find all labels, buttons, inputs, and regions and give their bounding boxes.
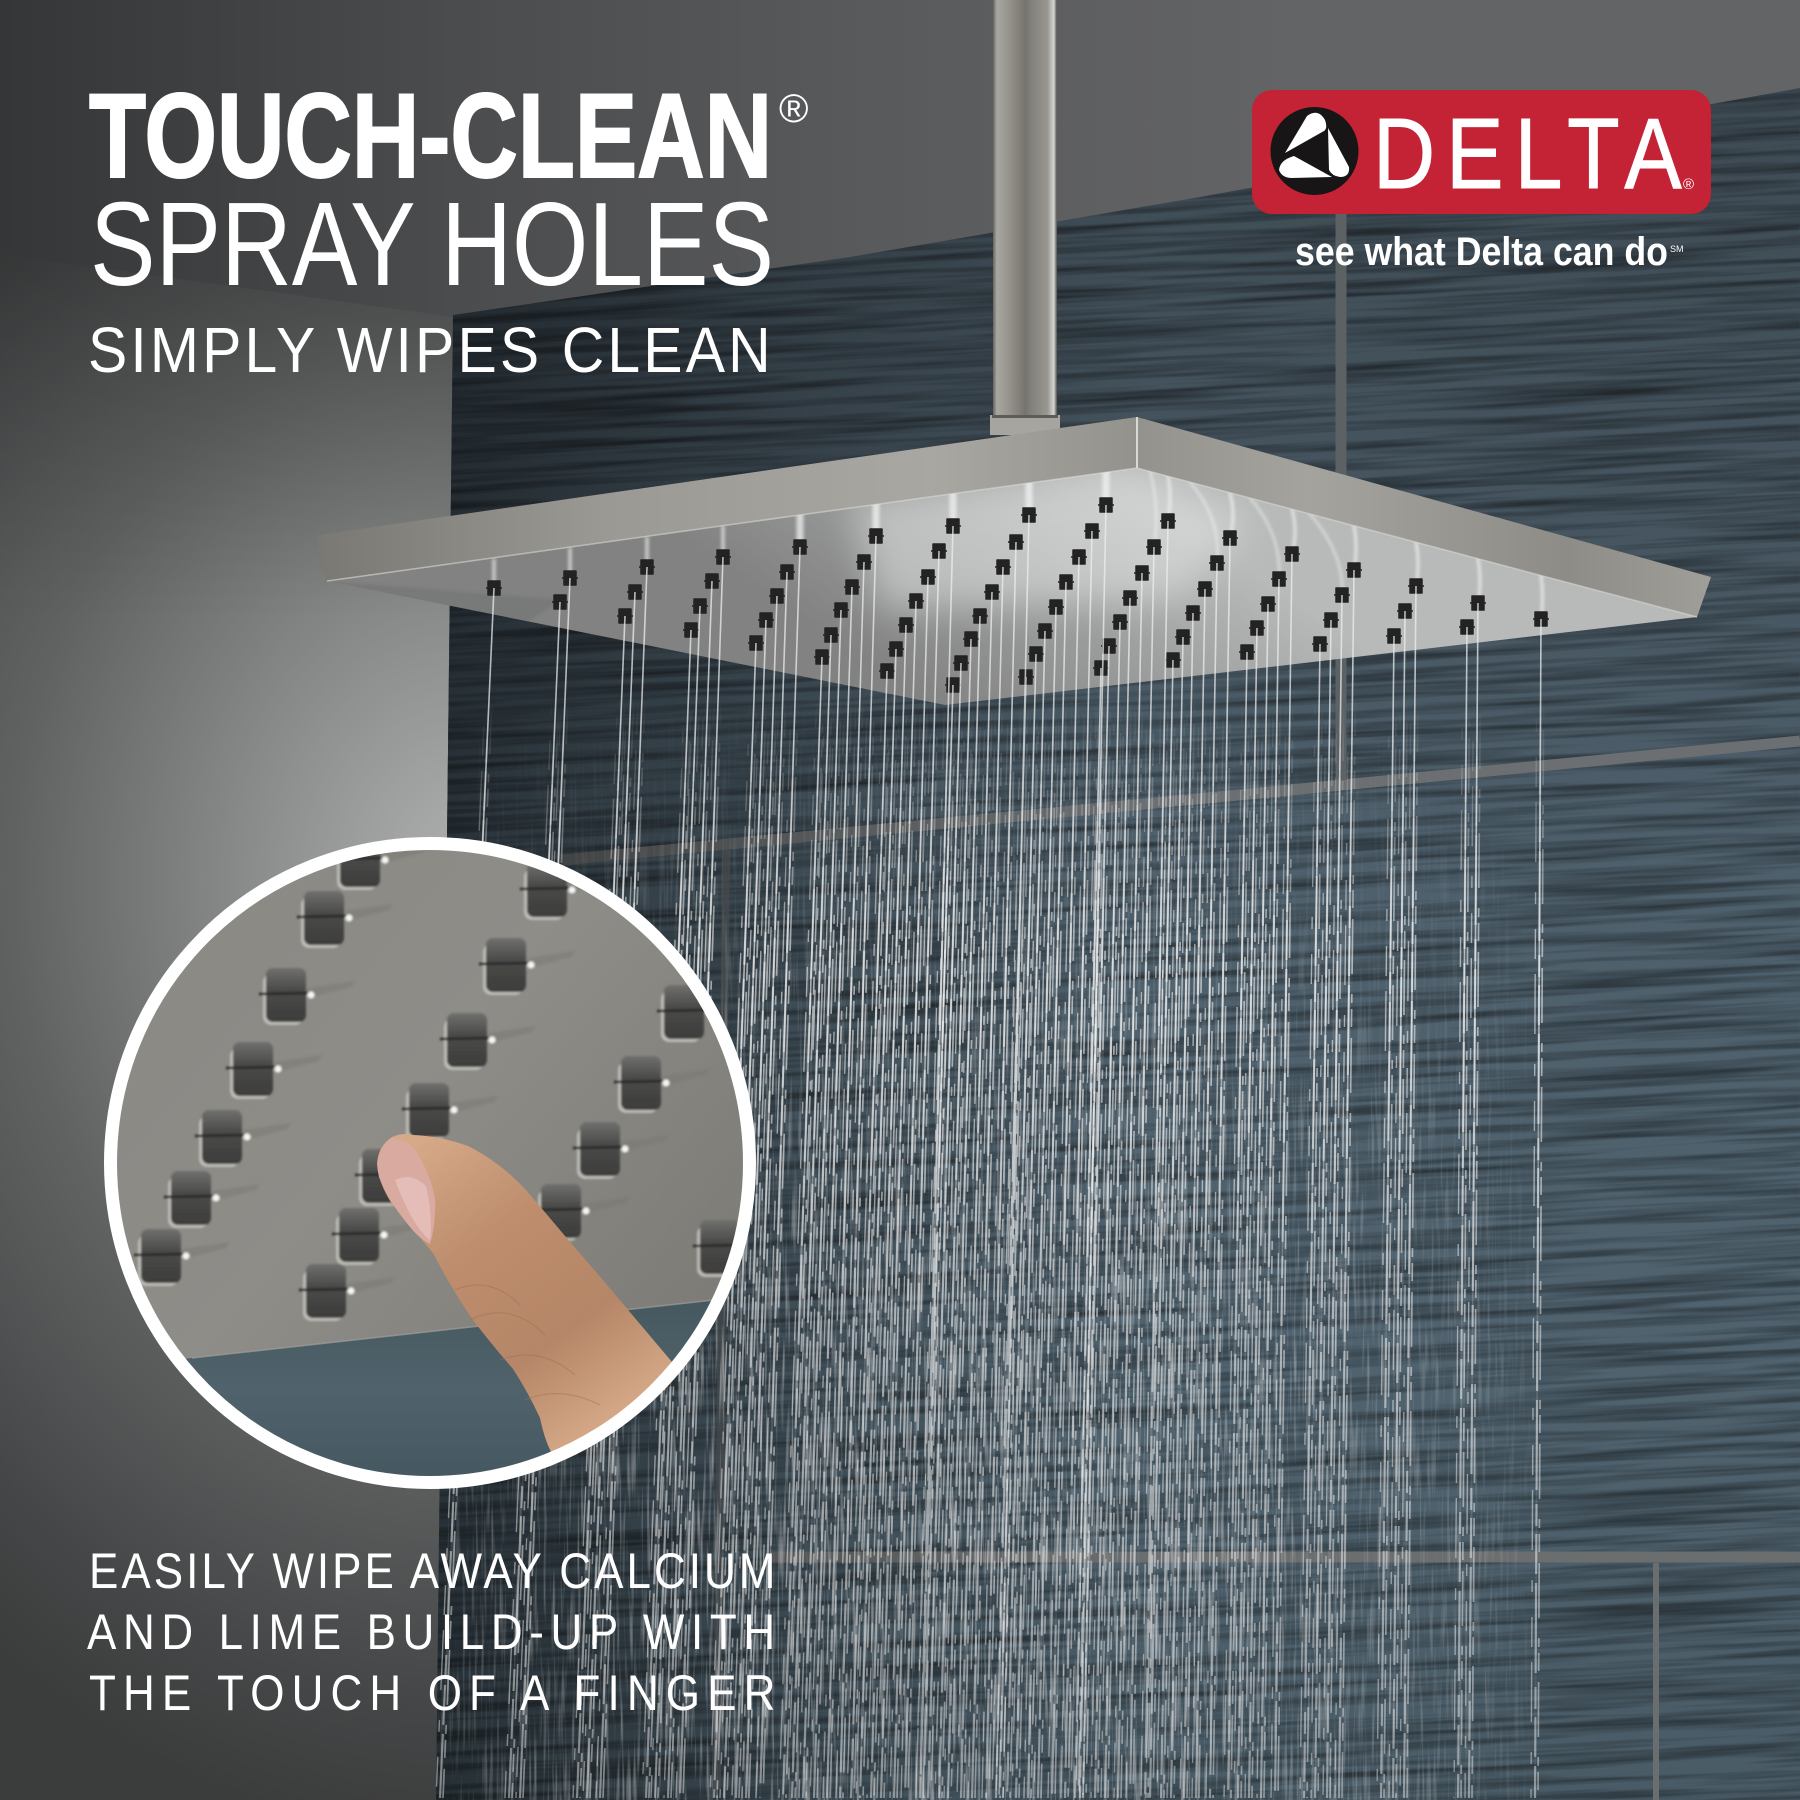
spray holes [486, 498, 1549, 692]
underside [327, 468, 1697, 705]
background: ceiling [0, 0, 1800, 340]
corner edge highlight [1136, 417, 1138, 468]
caption line 3: THE TOUCH OF A FINGER [89, 1664, 775, 1721]
white ring [110, 844, 750, 1482]
shower arm [990, 0, 1060, 435]
falling water texture [438, 690, 1545, 1800]
logo registered mark: ® [1683, 176, 1694, 193]
water streams [436, 505, 1544, 1798]
registered mark: ® [779, 87, 808, 131]
service mark: SM [1670, 244, 1684, 254]
bottom caption [87, 1542, 775, 1721]
Delta logo [1252, 90, 1711, 214]
caption line 2: AND LIME BUILD-UP WITH [87, 1603, 775, 1660]
close-up photo area [117, 850, 743, 1476]
finger [377, 1134, 672, 1452]
front-right face [1137, 417, 1711, 617]
background: left wall top shading [0, 254, 453, 620]
inner edge highlights [327, 468, 1697, 617]
caption line 1: EASILY WIPE AWAY CALCIUM [89, 1542, 775, 1599]
spray hole close-ups [132, 850, 738, 1322]
underside reflections [327, 470, 1542, 640]
background: tiled wall [436, 88, 1800, 1800]
blue tile under the head [186, 1300, 711, 1476]
background: left wall [0, 254, 453, 1800]
skin creases [455, 1285, 600, 1405]
grout lines [562, 170, 1800, 1800]
subtitle: SIMPLY WIPES CLEAN [88, 315, 771, 387]
front-left face [318, 417, 1137, 581]
red badge [1252, 90, 1711, 214]
fingernail [378, 1138, 435, 1244]
close-up circle callout [100, 830, 789, 1500]
title: TOUCH-CLEAN: TOUCH-CLEAN [89, 69, 772, 203]
tagline: see what Delta can do [1295, 230, 1668, 274]
title: SPRAY HOLES: SPRAY HOLES [90, 178, 774, 311]
shower head [318, 417, 1711, 705]
wordmark: DELTA [1373, 98, 1682, 209]
triangle emblem [1279, 113, 1349, 178]
black emblem circle [1270, 107, 1358, 195]
